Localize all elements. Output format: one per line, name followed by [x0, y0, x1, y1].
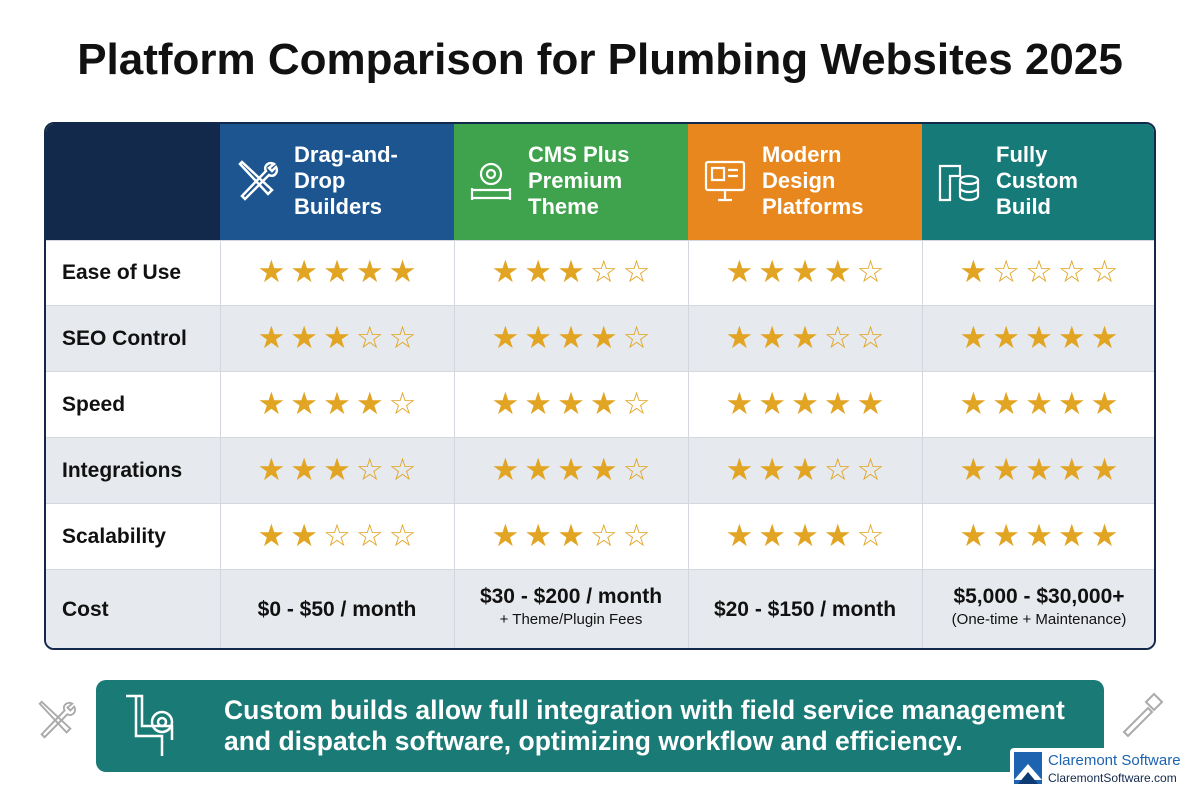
row: Integrations — [46, 437, 1154, 504]
logo: ClaremontSoftware.com — [1048, 771, 1177, 785]
row: Cost — [46, 569, 1154, 650]
header: Modern Design Platforms: Platforms — [762, 194, 863, 219]
row: SEO Control: ★★★★★ — [960, 320, 1123, 356]
header: Drag-and-Drop Builders: Drag-and- — [294, 142, 398, 167]
header: Drag-and-Drop Builders: Drop — [294, 168, 345, 193]
row: Ease of Use: ★★★☆☆ — [492, 254, 655, 290]
row: SEO Control: ★★★☆☆ — [258, 320, 421, 356]
row: Ease of Use: ★★★★★ — [258, 254, 421, 290]
row: Cost: (One-time + Maintenance) — [952, 611, 1126, 628]
header: Fully Custom Build: Fully — [996, 142, 1047, 167]
row: Scalability: ★★★★★ — [960, 518, 1123, 554]
icon: pipe wrench right — [1122, 692, 1164, 738]
row: SEO Control — [46, 305, 1154, 372]
row: Ease of Use: ★★★★☆ — [726, 254, 889, 290]
logo: Claremont Software — [1048, 752, 1181, 769]
row: Cost: Cost — [62, 598, 109, 621]
header: Modern Design Platforms: Modern — [762, 142, 841, 167]
row: Cost: $5,000 - $30,000+ — [953, 585, 1125, 608]
row: Integrations: ★★★★☆ — [492, 452, 655, 488]
header: Fully Custom Build: Build — [996, 194, 1051, 219]
callout banner: and dispatch software, optimizing workflow and efficiency. — [224, 726, 963, 756]
row: SEO Control: ★★★☆☆ — [726, 320, 889, 356]
row: SEO Control: SEO Control — [62, 327, 187, 350]
row: Ease of Use: Ease of Use — [62, 261, 181, 284]
callout banner: Custom builds allow full integration with field service management — [224, 695, 1065, 725]
row: Scalability — [46, 503, 1154, 570]
row: Ease of Use — [46, 240, 1154, 306]
header: Fully Custom Build: Custom — [996, 168, 1078, 193]
row: Cost: $30 - $200 / month — [480, 585, 662, 608]
row: Speed: ★★★★☆ — [258, 386, 421, 422]
header: Modern Design Platforms: Design — [762, 168, 835, 193]
row: Integrations: Integrations — [62, 459, 182, 482]
row: Scalability: Scalability — [62, 525, 166, 548]
comparison table — [44, 122, 1156, 650]
row: Speed: ★★★★★ — [726, 386, 889, 422]
row: Integrations: ★★★★★ — [960, 452, 1123, 488]
row: Cost: $0 - $50 / month — [258, 598, 416, 621]
row: Scalability: ★★☆☆☆ — [258, 518, 421, 554]
header: CMS Plus Premium Theme: CMS Plus — [528, 142, 629, 167]
row: Cost: + Theme/Plugin Fees — [500, 611, 642, 628]
icon: pipe gear — [126, 694, 174, 756]
row: SEO Control: ★★★★☆ — [492, 320, 655, 356]
row: Ease of Use: ★☆☆☆☆ — [960, 254, 1123, 290]
header: Fully Custom Build — [922, 124, 1154, 240]
row: Speed: ★★★★☆ — [492, 386, 655, 422]
row: Speed: ★★★★★ — [960, 386, 1123, 422]
header: CMS Plus Premium Theme — [454, 124, 688, 240]
header: label corner — [46, 124, 220, 240]
header: CMS Plus Premium Theme: Premium — [528, 168, 622, 193]
header: Modern Design Platforms — [688, 124, 922, 240]
row: Scalability: ★★★★☆ — [726, 518, 889, 554]
title: Platform Comparison for Plumbing Websites 2025 — [77, 35, 1123, 84]
header: Drag-and-Drop Builders — [220, 124, 454, 240]
header: CMS Plus Premium Theme: Theme — [528, 194, 599, 219]
row: Scalability: ★★★☆☆ — [492, 518, 655, 554]
icon: wrench left — [38, 700, 76, 738]
row: Integrations: ★★★☆☆ — [258, 452, 421, 488]
row: Integrations: ★★★☆☆ — [726, 452, 889, 488]
logo — [1010, 748, 1190, 792]
callout banner — [96, 680, 1104, 772]
row: Speed — [46, 371, 1154, 438]
header: Drag-and-Drop Builders: Builders — [294, 194, 382, 219]
row: Cost: $20 - $150 / month — [714, 598, 896, 621]
row: Speed: Speed — [62, 393, 125, 416]
